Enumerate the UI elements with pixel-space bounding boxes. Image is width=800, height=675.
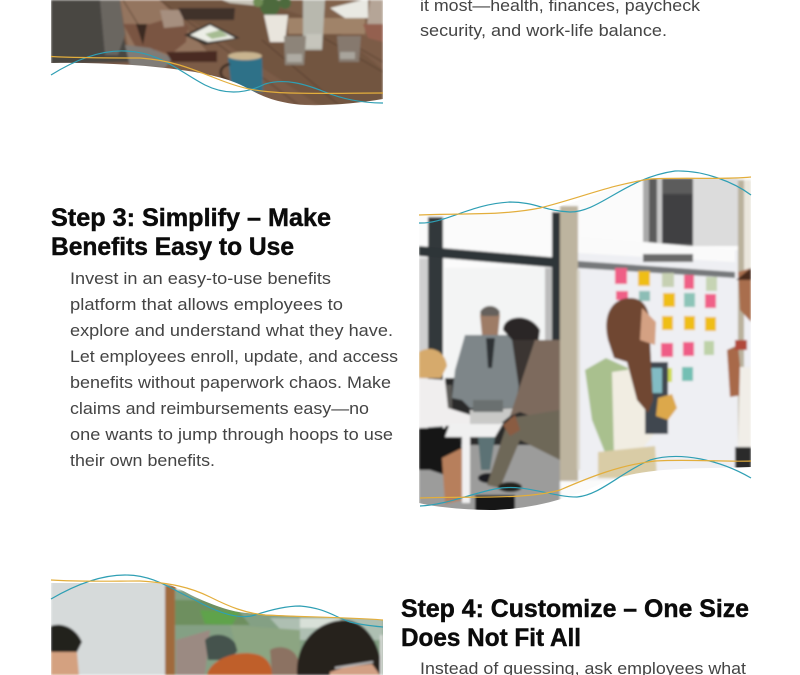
photo: team at wooden table with wave overlay bbox=[51, 0, 383, 106]
wave lines bbox=[419, 171, 751, 506]
seated woman bbox=[419, 347, 472, 504]
heading: step 3: Benefits Easy to Use bbox=[51, 233, 294, 261]
wave lines bbox=[51, 51, 383, 103]
text block: step 2 closing lines: security, and work-life balance. bbox=[420, 22, 667, 40]
photo: office meeting with sticky-note wall and wave overlay bbox=[419, 170, 751, 515]
woman with scarf and book bbox=[585, 298, 677, 478]
right-side man bbox=[727, 268, 751, 472]
text block: step 3 description: their own benefits. bbox=[70, 452, 215, 470]
heading: step 3 bbox=[51, 204, 331, 261]
text block: step 3 description: platform that allows employees to bbox=[70, 296, 343, 314]
text block: step 3 description: benefits without paperwork chaos. Make bbox=[70, 374, 391, 392]
heading: step 4: Step 4: Customize – One Size bbox=[401, 595, 749, 623]
text block: step 3 description bbox=[70, 270, 398, 470]
left man's head bbox=[51, 625, 82, 675]
red-haired woman bbox=[207, 653, 272, 675]
leaning man bbox=[475, 318, 560, 515]
text block: step 3 description: explore and understand what they have. bbox=[70, 322, 393, 340]
text block: step 3 description: one wants to jump through hoops to use bbox=[70, 426, 393, 444]
heading: step 4 bbox=[401, 595, 749, 652]
text block: step 3 description: claims and reimbursements easy—no bbox=[70, 400, 369, 418]
text block: step 3 description: Invest in an easy-to-use benefits bbox=[70, 270, 331, 288]
woman with glasses bbox=[297, 620, 382, 675]
wave lines bbox=[51, 575, 383, 627]
standing man bbox=[452, 306, 520, 483]
heading: step 3: Step 3: Simplify – Make bbox=[51, 204, 331, 232]
text block: step 2 closing lines bbox=[420, 0, 701, 40]
photo: colleagues in front of green painting with wave overlay bbox=[51, 575, 385, 675]
sticky notes bbox=[615, 268, 717, 382]
heading: step 4: Does Not Fit All bbox=[401, 624, 581, 652]
text block: step 3 description: Let employees enroll, update, and access bbox=[70, 348, 398, 366]
